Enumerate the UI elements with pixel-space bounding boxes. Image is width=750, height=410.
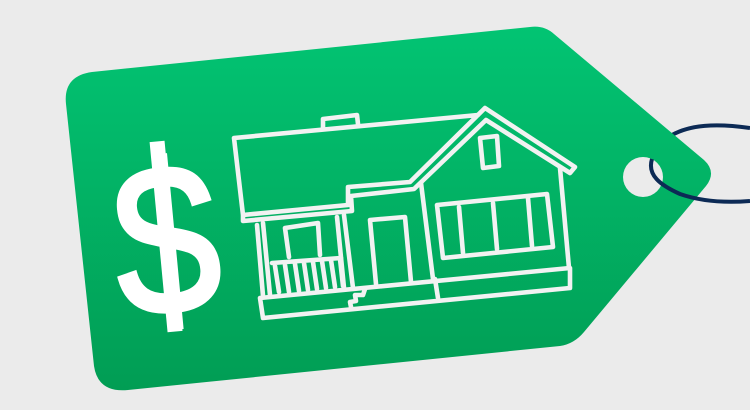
gable window [480, 136, 499, 168]
tag body [66, 27, 711, 390]
main roof [234, 108, 575, 221]
foundation [260, 268, 570, 318]
porch steps [350, 289, 365, 307]
chimney [323, 115, 358, 128]
front door [370, 217, 411, 284]
dollar sign: $ [104, 118, 229, 363]
front of string [651, 159, 750, 202]
house line drawing [234, 108, 575, 318]
large window [437, 194, 553, 258]
porch railing [272, 258, 343, 292]
back of string [672, 125, 750, 135]
house wall [421, 168, 569, 279]
tag hole [623, 157, 663, 197]
porch posts [257, 215, 353, 296]
porch window [285, 223, 320, 257]
